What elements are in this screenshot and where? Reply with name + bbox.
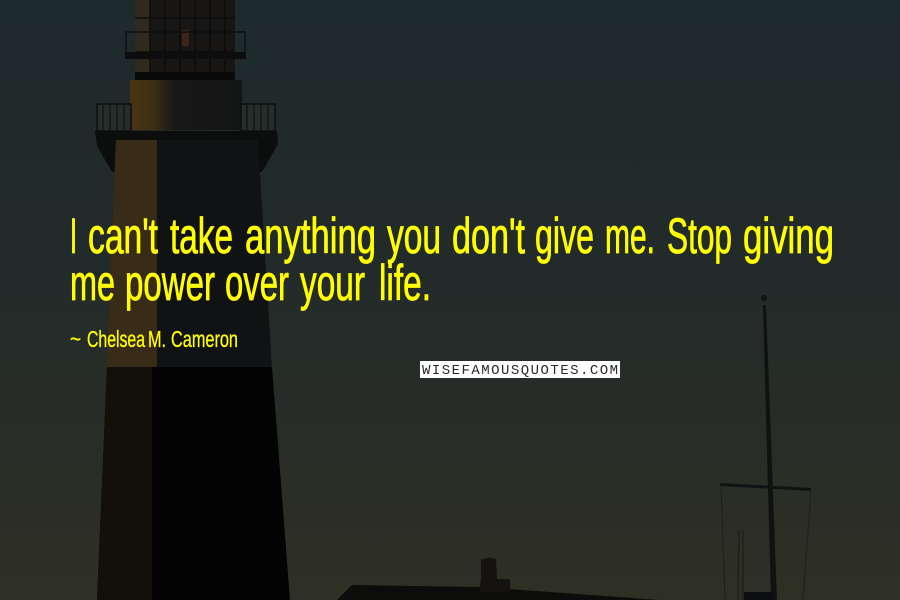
author attribution: M. <box>148 326 166 352</box>
quote line 1: giving <box>743 208 834 264</box>
lighthouse <box>95 0 290 600</box>
rooftop and chimney <box>337 558 660 600</box>
ship mast <box>720 295 811 600</box>
gallery railing <box>95 104 278 172</box>
quote line 1: I <box>70 208 77 264</box>
upper tower section <box>130 80 242 130</box>
quote line 1: me. <box>605 208 655 264</box>
author attribution: ~ <box>70 326 81 352</box>
quote line 2: me <box>70 255 115 311</box>
author attribution: Cameron <box>171 326 238 352</box>
quote line 1: give <box>535 208 594 264</box>
quote line 1: you <box>387 208 441 264</box>
quote line 2: over <box>225 255 289 311</box>
tower body lower dark band <box>97 367 290 600</box>
quote line 2: life. <box>379 255 431 311</box>
lantern room <box>125 0 246 80</box>
quote line 1: don't <box>452 208 525 264</box>
author attribution: Chelsea <box>87 326 145 352</box>
quote text <box>70 208 834 311</box>
tower body upper lit band <box>106 140 272 368</box>
watermark badge: WISEFAMOUSQUOTES.COM <box>422 363 618 379</box>
quote line 2 <box>70 255 431 311</box>
quote line 1: take <box>170 208 233 264</box>
quote line 2: power <box>125 255 215 311</box>
quote line 1: anything <box>245 208 376 264</box>
quote line 1: can't <box>88 208 158 264</box>
quote line 1: Stop <box>667 208 732 264</box>
author attribution <box>70 326 238 352</box>
quote line 2: your <box>300 255 365 311</box>
quote line 1 <box>70 208 834 264</box>
